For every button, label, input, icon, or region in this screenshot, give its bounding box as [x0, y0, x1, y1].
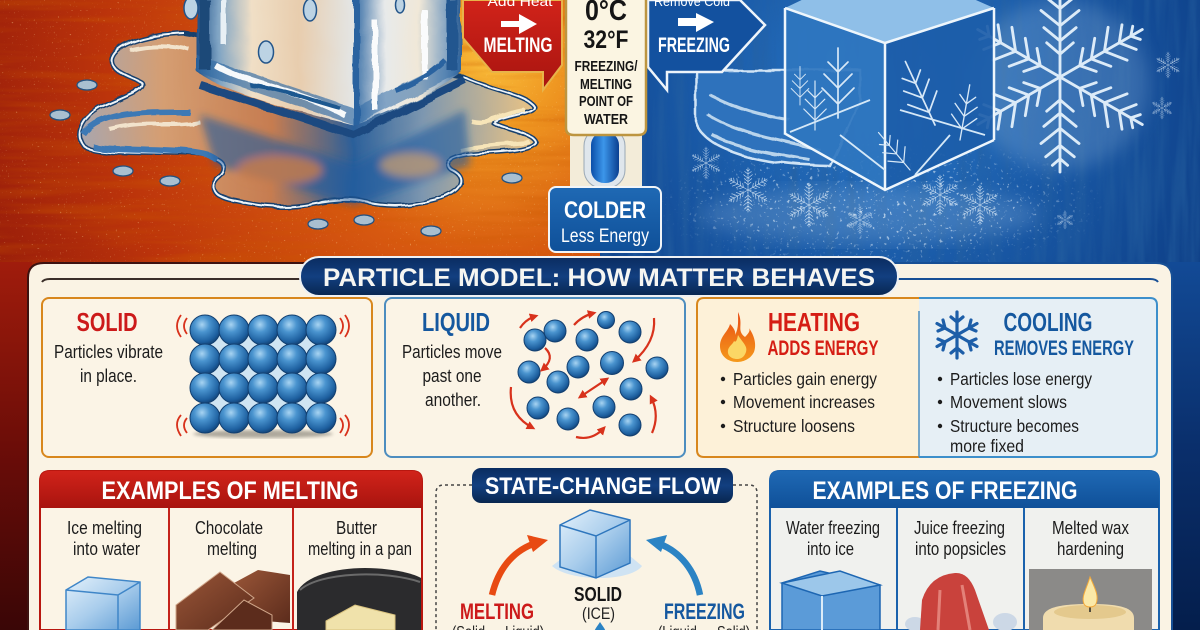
heating bullets — [721, 369, 877, 436]
heading: particle model: PARTICLE MODEL: HOW MATTER BEHAVES — [323, 264, 875, 292]
arrow: heat — [501, 14, 537, 34]
colder heading: COLDER — [564, 197, 646, 224]
caption: ice melting: into water — [73, 539, 140, 559]
center thermometer strip — [570, 128, 642, 192]
stray water drops — [50, 80, 522, 236]
liquid description: another. — [425, 390, 481, 410]
liquid particles — [518, 312, 668, 436]
panel: solid — [42, 298, 372, 457]
point caption — [574, 58, 638, 128]
freezing sign — [648, 0, 765, 90]
freezing header: EXAMPLES OF FREEZING — [812, 477, 1078, 505]
heading: particle model — [300, 257, 898, 296]
removes energy: REMOVES ENERGY — [994, 337, 1134, 360]
panel: examples of freezing — [770, 471, 1159, 630]
label: ice: (ICE) — [582, 604, 615, 623]
adds energy: ADDS ENERGY — [768, 337, 878, 360]
icon: snowflake — [937, 312, 977, 358]
icon: water drop — [594, 622, 606, 630]
solid description — [54, 342, 163, 386]
arrow: freezing — [646, 535, 700, 595]
label: freezing: FREEZING — [664, 599, 745, 624]
ice cube faces — [197, 0, 465, 135]
large snowflake — [968, 0, 1152, 172]
sign text: freezing: FREEZING — [658, 34, 730, 57]
icon: ice cube — [782, 571, 880, 630]
point caption: FREEZING/ — [574, 58, 638, 75]
icon: ice cube melting — [66, 577, 140, 630]
heating bullets: Structure loosens — [733, 416, 855, 436]
caption: ice melting: Ice melting — [67, 518, 142, 538]
main panel — [28, 257, 1172, 630]
32 degrees F: 32°F — [584, 26, 628, 54]
caption: melted wax — [1052, 518, 1129, 559]
caption: chocolate: Chocolate — [195, 518, 263, 538]
cooling bullets: Movement slows — [950, 392, 1067, 412]
liquid description: Particles move — [402, 342, 502, 362]
caption: water freezing — [786, 518, 880, 559]
illustration: frozen ice cube and snowflakes — [691, 0, 1181, 234]
liquid description — [402, 342, 502, 410]
caption: butter: melting in a pan — [308, 539, 412, 559]
solid heading: SOLID — [76, 307, 138, 337]
icon: candle — [1029, 569, 1152, 630]
arrow: cold — [678, 13, 714, 32]
heating heading: HEATING — [768, 307, 860, 337]
caption: juice freezing — [914, 518, 1006, 559]
melting sign — [463, 0, 562, 90]
caption: chocolate — [195, 518, 263, 559]
cooling bullets: Structure becomes — [950, 416, 1079, 436]
caption: ice melting — [67, 518, 142, 559]
ice cube — [784, 0, 994, 190]
icon: flame — [720, 312, 755, 362]
flow heading — [472, 468, 733, 503]
solid particle grid — [177, 315, 349, 438]
panel: liquid — [385, 298, 685, 457]
label: melting: MELTING — [460, 599, 534, 624]
icon: chocolate — [176, 570, 290, 630]
illustration: melting ice cube and puddle — [50, 0, 536, 236]
caption: water freezing: into ice — [807, 539, 854, 559]
small snowflakes — [691, 52, 1181, 234]
point caption: MELTING — [580, 76, 632, 93]
thermometer tube — [584, 128, 625, 188]
caption: butter: Butter — [336, 518, 377, 538]
solid description: Particles vibrate — [54, 342, 163, 362]
caption: juice freezing: Juice freezing — [914, 518, 1005, 538]
icon: popsicle — [905, 573, 1017, 630]
puddle reflection — [200, 110, 470, 205]
panel: examples of melting — [40, 471, 422, 630]
liquid heading: LIQUID — [422, 307, 490, 337]
less energy: Less Energy — [561, 226, 649, 247]
colder label — [549, 187, 661, 252]
puddle — [80, 33, 536, 207]
panel: state-change flow — [436, 468, 757, 630]
caption: butter — [308, 518, 412, 559]
icon: ice cube solid — [552, 510, 642, 578]
caption: water freezing: Water freezing — [786, 518, 880, 538]
caption: juice freezing: into popsicles — [915, 539, 1006, 559]
heating bullets: Particles gain energy — [733, 369, 877, 389]
melting header: EXAMPLES OF MELTING — [102, 477, 358, 505]
background: lower side margins — [0, 262, 1200, 630]
heating bullets: Movement increases — [733, 392, 875, 412]
flow heading: STATE-CHANGE FLOW — [485, 473, 721, 500]
frozen water disc — [696, 70, 860, 166]
arrow: melting — [492, 535, 548, 595]
temperature label — [566, 0, 646, 135]
icon: butter in pan — [297, 568, 421, 630]
water droplets on cube — [184, 0, 404, 63]
point caption: WATER — [584, 111, 628, 128]
liquid motion arrows — [511, 313, 656, 438]
caption: melted wax: Melted wax — [1052, 518, 1129, 538]
cooling bullets: Particles lose energy — [950, 369, 1092, 389]
sign text: melting: MELTING — [484, 34, 552, 57]
panel: heating and cooling — [697, 298, 1157, 457]
background: cold side — [600, 0, 1200, 270]
cooling bullets: more fixed — [950, 436, 1024, 456]
background: hot side — [0, 0, 600, 270]
label: solid: SOLID — [574, 584, 622, 606]
caption: melted wax: hardening — [1057, 539, 1124, 559]
liquid description: past one — [422, 366, 482, 386]
cooling bullets — [938, 369, 1092, 456]
solid description: in place. — [80, 366, 137, 386]
caption: chocolate: melting — [207, 539, 257, 559]
cooling heading: COOLING — [1004, 307, 1092, 337]
point caption: POINT OF — [579, 93, 633, 110]
